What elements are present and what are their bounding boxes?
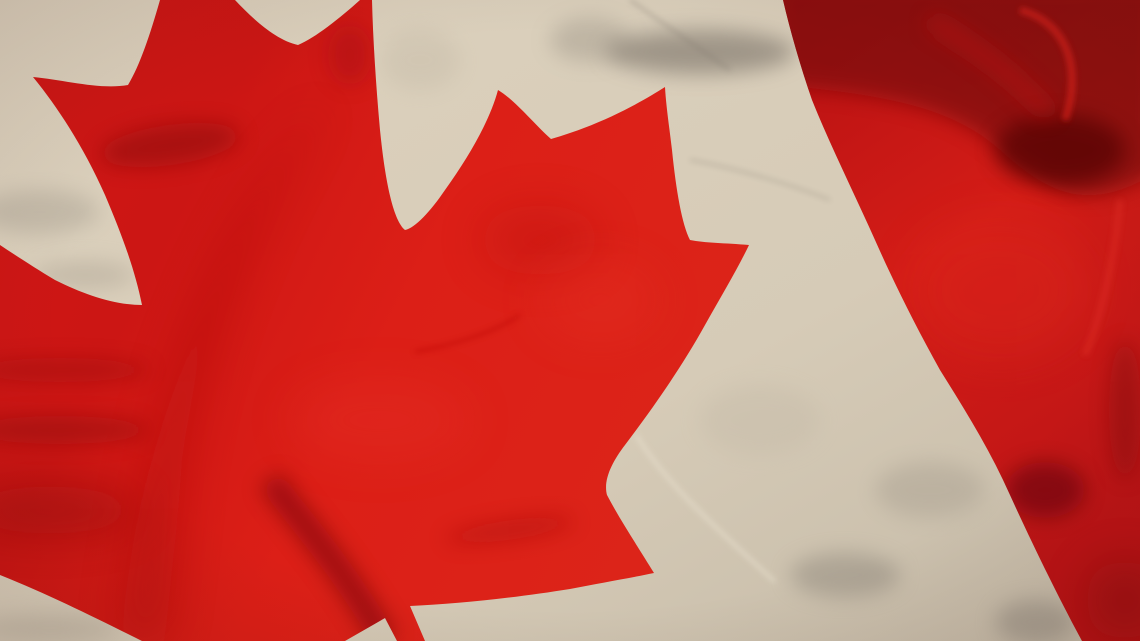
maple leaf (0, 0, 800, 641)
leaf folds and shadows (0, 24, 585, 641)
right red band (760, 0, 1140, 641)
band folds and shadows (770, 0, 1140, 640)
